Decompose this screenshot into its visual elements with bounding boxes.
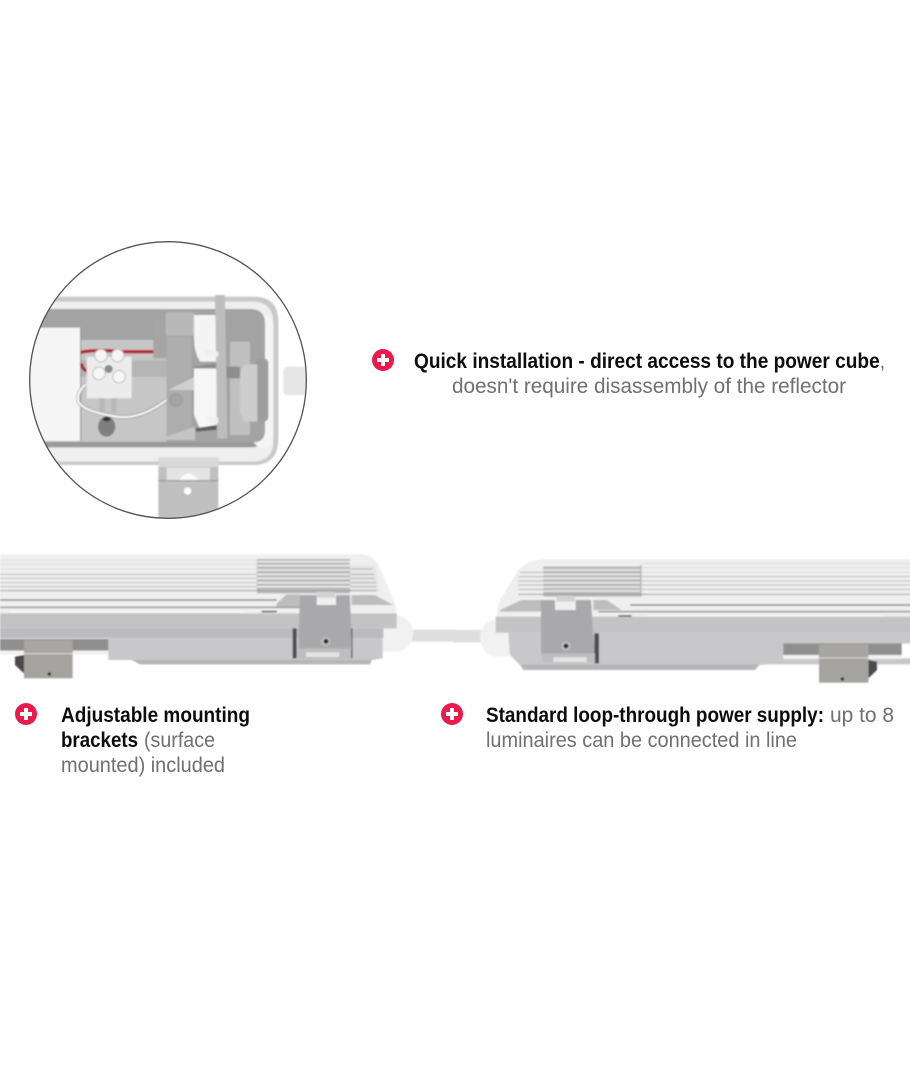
mounting bracket bbox=[158, 458, 218, 521]
detail circle: power cube close-up bbox=[20, 242, 307, 521]
housing band bbox=[496, 617, 910, 633]
screw post bbox=[98, 417, 115, 437]
icon: plus badge bbox=[15, 703, 37, 725]
icon: plus badge bbox=[441, 703, 463, 725]
end cap bbox=[480, 619, 510, 657]
cable bbox=[410, 630, 457, 642]
icon: plus badge bbox=[372, 349, 394, 371]
housing bbox=[54, 296, 279, 466]
clip bbox=[293, 628, 297, 658]
gland bbox=[264, 358, 269, 422]
feature text: mounting brackets: mounted) included bbox=[61, 754, 225, 777]
lower body bbox=[508, 633, 910, 665]
clip bbox=[594, 633, 599, 663]
diffuser bbox=[496, 559, 910, 617]
feature text: quick installation bbox=[372, 349, 885, 398]
lower body bbox=[108, 638, 383, 660]
bracket bbox=[819, 644, 868, 658]
feature text: loop-through power supply bbox=[441, 703, 894, 752]
right luminaire bbox=[453, 559, 910, 683]
driver box bbox=[39, 326, 82, 442]
feature text: mounting brackets: (surface bbox=[144, 729, 215, 752]
rail channel bbox=[783, 643, 902, 655]
feature text: loop-through power supply: Standard loop-through power supply: bbox=[486, 704, 824, 727]
clip strap bbox=[215, 295, 227, 438]
internal bracket bbox=[152, 340, 168, 359]
end wall bbox=[253, 431, 268, 447]
feature text: mounting brackets: brackets bbox=[61, 729, 138, 752]
diffuser bbox=[0, 554, 397, 613]
lamp holders bbox=[194, 315, 217, 362]
end cap bbox=[383, 614, 413, 652]
feature text: mounting brackets: Adjustable mounting bbox=[61, 704, 250, 727]
feature text: loop-through power supply: luminaires can be connected in line bbox=[486, 729, 797, 752]
feature text: mounting brackets bbox=[15, 703, 250, 777]
rail channel bbox=[0, 639, 108, 651]
housing band bbox=[0, 613, 397, 628]
feature text: loop-through power supply: up to 8 bbox=[830, 704, 894, 727]
white wire bbox=[78, 384, 167, 417]
left luminaire bbox=[0, 554, 457, 678]
feature text: quick installation: doesn't require disassembly of the reflector bbox=[452, 375, 846, 398]
red wires bbox=[81, 350, 167, 352]
outlet bbox=[283, 367, 307, 395]
bracket bbox=[24, 640, 73, 653]
terminal block bbox=[87, 357, 132, 398]
cable bbox=[453, 630, 483, 642]
